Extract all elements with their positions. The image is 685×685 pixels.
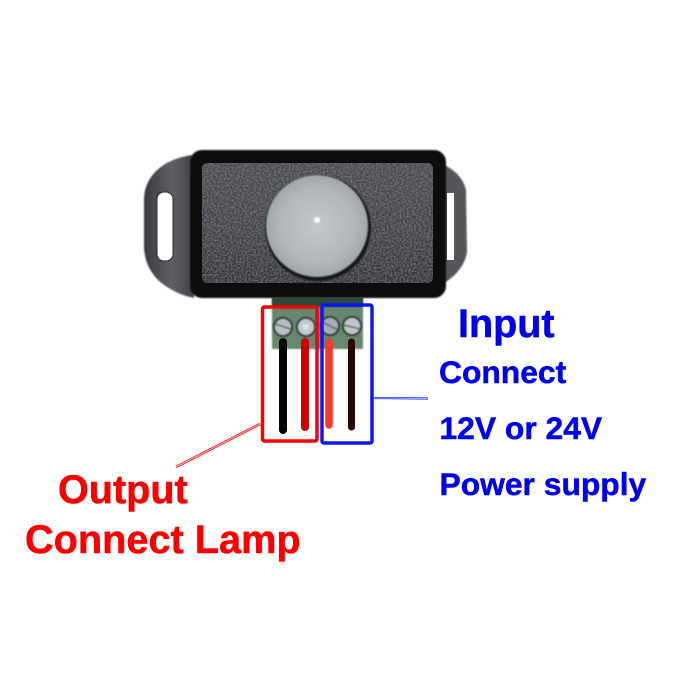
input description <box>439 354 647 502</box>
output leader line <box>176 424 260 467</box>
input highlight box <box>322 305 372 443</box>
output wires <box>283 342 305 430</box>
PIR dome lens <box>265 175 371 281</box>
left mounting tab <box>144 155 194 298</box>
wires <box>283 342 352 430</box>
input description: Power supply <box>440 466 647 502</box>
screw terminals <box>274 317 361 336</box>
input heading: Input <box>458 302 555 346</box>
output highlight box <box>262 307 317 441</box>
sensor device <box>144 150 467 349</box>
input leader line <box>374 397 428 400</box>
input wires <box>329 342 352 427</box>
output heading: Output <box>58 468 188 512</box>
right mounting tab <box>444 165 467 283</box>
housing <box>190 150 446 298</box>
terminal block <box>272 298 363 349</box>
output description: Connect Lamp <box>25 518 301 562</box>
input description: 12V or 24V <box>440 410 602 446</box>
housing face <box>202 163 433 283</box>
input description: Connect <box>439 354 567 390</box>
